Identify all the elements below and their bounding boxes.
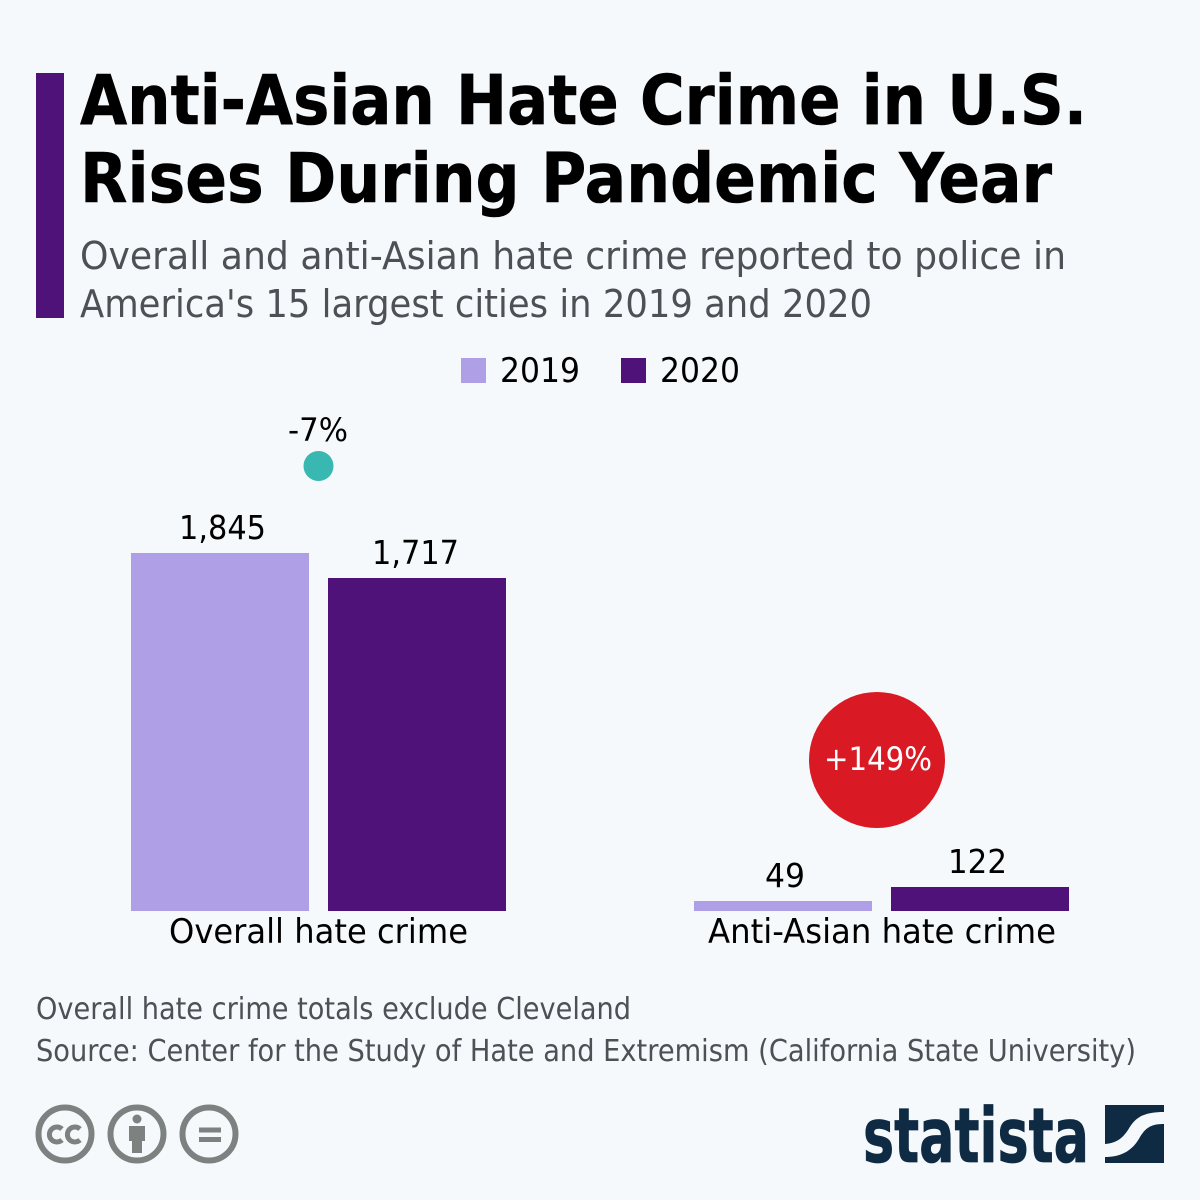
- footnote and source: [36, 992, 1136, 1069]
- legend: 2019: [500, 351, 580, 391]
- bar chart: anti-Asian hate crime: 122: [948, 842, 1007, 881]
- bar chart: overall hate crime: Overall hate crime: [169, 912, 468, 952]
- bar chart: anti-Asian hate crime: Anti-Asian hate crime: [708, 912, 1056, 952]
- subtitle: Overall and anti-Asian hate crime reported to police in: [80, 234, 1066, 278]
- bar chart: overall hate crime: 1,845: [179, 508, 266, 547]
- subtitle: America's 15 largest cities in 2019 and 2020: [80, 282, 872, 326]
- title: [80, 61, 1087, 219]
- legend: 2020: [660, 351, 740, 391]
- icon: no derivatives: [182, 1108, 236, 1160]
- legend: [461, 351, 740, 391]
- title accent bar: [36, 73, 64, 318]
- icon: attribution: [110, 1108, 164, 1160]
- callout: overall change: -7%: [288, 411, 348, 449]
- callout: anti-Asian change: [809, 692, 945, 828]
- icon: creative commons: [38, 1108, 92, 1160]
- bar chart: overall hate crime: [131, 508, 506, 952]
- bar chart: anti-Asian hate crime: 49: [765, 856, 805, 895]
- bar chart: anti-Asian hate crime: [694, 842, 1069, 952]
- title: Rises During Pandemic Year: [80, 139, 1052, 219]
- bar chart: overall hate crime: 1,717: [372, 533, 459, 572]
- title: Anti-Asian Hate Crime in U.S.: [80, 61, 1087, 141]
- callout: overall change: [288, 411, 348, 481]
- footnote and source: Overall hate crime totals exclude Cleveland: [36, 992, 631, 1027]
- subtitle: [80, 234, 1066, 326]
- callout: anti-Asian change: +149%: [824, 740, 932, 778]
- logo: statista: statista: [863, 1091, 1089, 1180]
